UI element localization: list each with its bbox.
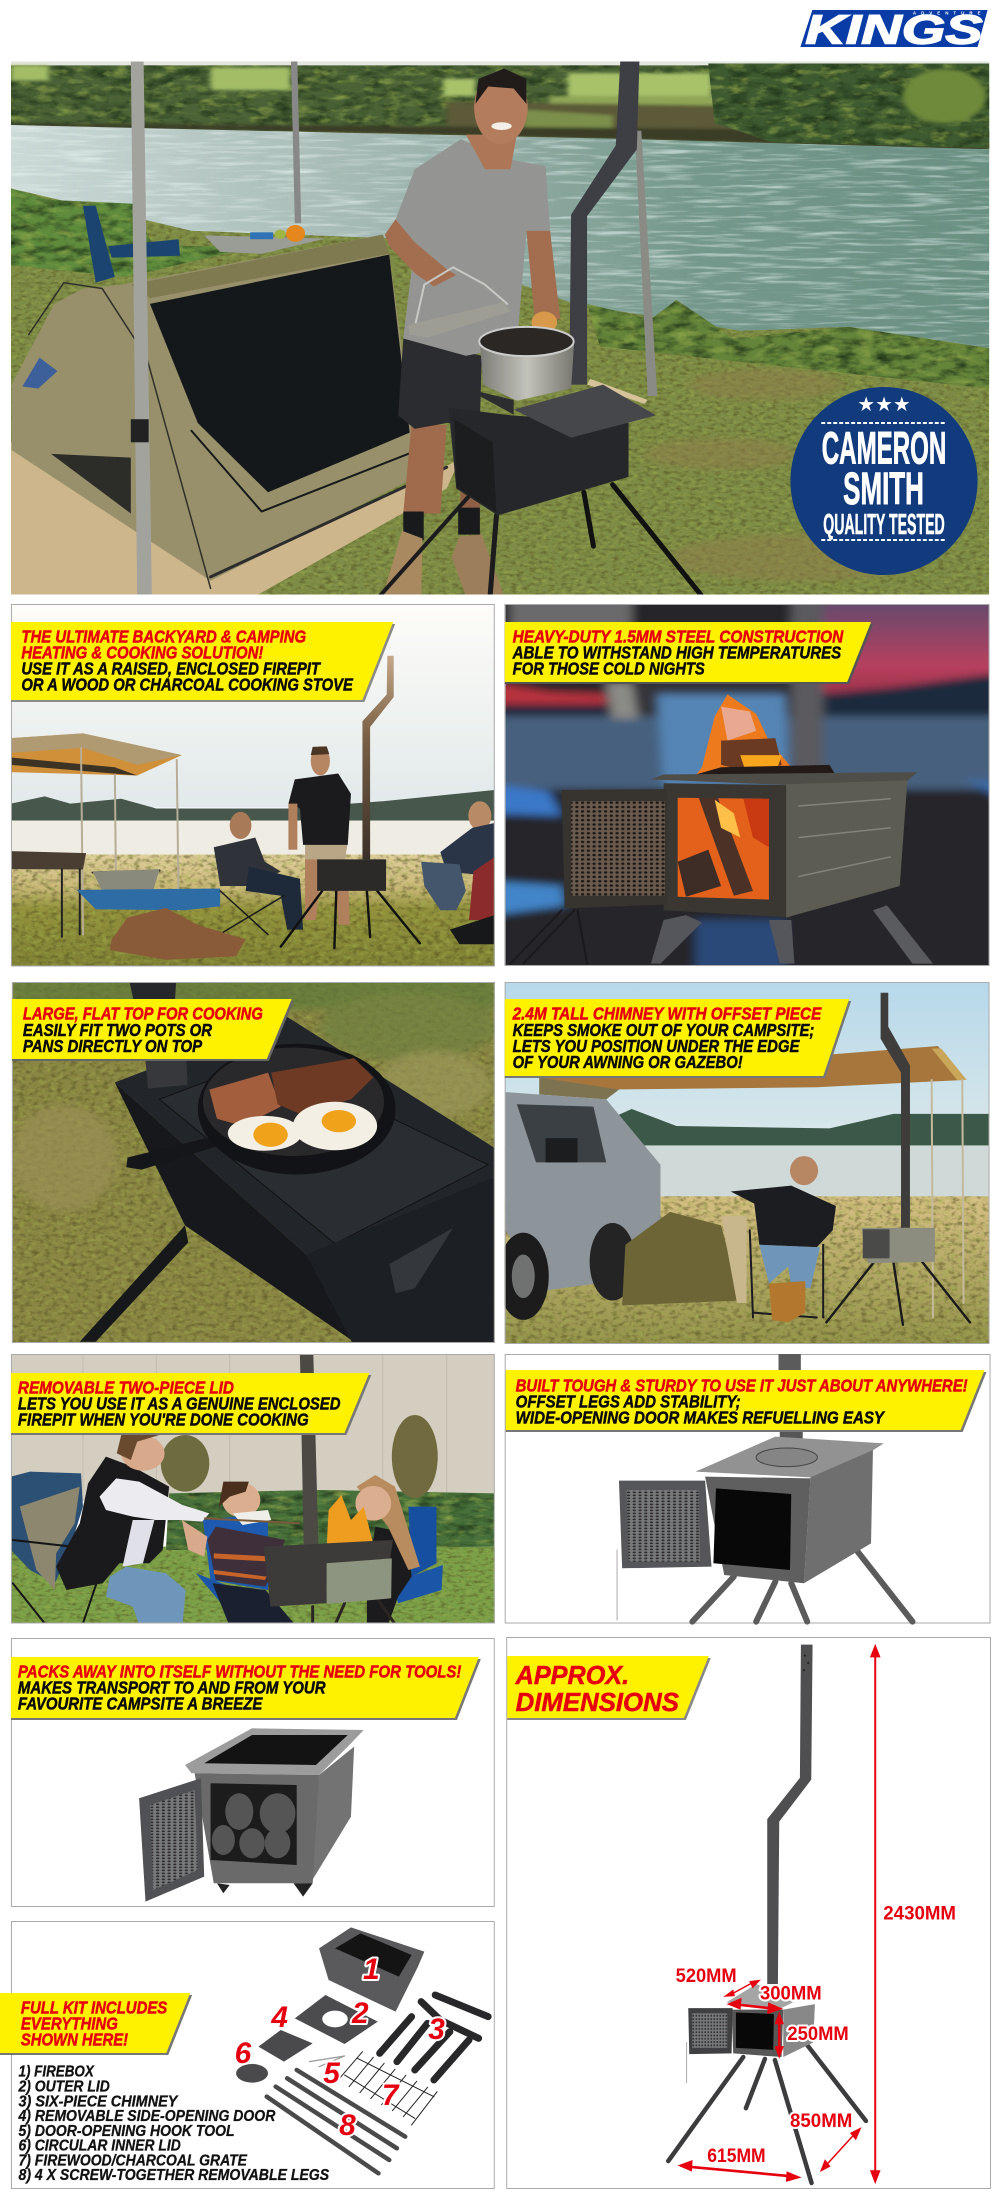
dimension labels: 2430MM <box>883 1903 956 1924</box>
photo: camper under awning <box>498 976 992 1351</box>
banner: OR A WOOD OR CHARCOAL COOKING STOVE <box>21 675 354 695</box>
dimension labels: 520MM <box>676 1966 737 1987</box>
chimney <box>569 62 639 385</box>
panel: hero photo <box>11 62 989 600</box>
woman <box>106 1567 186 1625</box>
flame <box>327 1495 374 1547</box>
product: stove packed with tubes <box>139 1728 364 1902</box>
banner <box>506 1370 987 1432</box>
product: kit parts <box>236 1927 488 2173</box>
parts list: 1) FIREBOX <box>19 2064 95 2081</box>
banner <box>11 1657 481 1720</box>
dimension labels: 615MM <box>707 2146 766 2167</box>
logo: Kings: KINGS <box>805 6 983 53</box>
banner: USE IT AS A RAISED, ENCLOSED FIREPIT <box>21 659 321 679</box>
panel: removable lid <box>11 1354 496 1627</box>
pot <box>480 340 574 401</box>
dimension labels: 300MM <box>760 1984 822 2005</box>
part numbers: 5 <box>323 2057 340 2090</box>
girl <box>367 1527 412 1625</box>
parts list: 2) OUTER LID <box>18 2079 110 2096</box>
banner <box>505 999 851 1078</box>
banner: LARGE, FLAT TOP FOR COOKING <box>23 1003 263 1024</box>
parts list: 4) REMOVABLE SIDE-OPENING DOOR <box>18 2108 276 2125</box>
banner: HEATING & COOKING SOLUTION! <box>21 643 263 663</box>
photo: campers around stove <box>11 604 496 968</box>
banner <box>0 1993 192 2055</box>
badge: Cameron Smith quality tested: ★★★ <box>857 392 911 416</box>
panel: backyard and camping <box>11 604 496 968</box>
banner: WIDE-OPENING DOOR MAKES REFUELLING EASY <box>516 1407 885 1427</box>
banner: SHOWN HERE! <box>21 2029 128 2049</box>
banner: DIMENSIONS <box>516 1689 680 1717</box>
photo: family with marshmallows <box>11 1354 496 1627</box>
man <box>750 1230 823 1318</box>
part numbers: 2 <box>351 1997 369 2030</box>
panel: heavy-duty steel <box>491 595 1000 978</box>
photo: frying pan on stove <box>10 976 498 1354</box>
banner: MAKES TRANSPORT TO AND FROM YOUR <box>18 1677 326 1697</box>
camp chair <box>83 206 180 283</box>
tent <box>622 1212 740 1305</box>
car <box>539 1078 619 1099</box>
panel: tall chimney <box>498 976 992 1351</box>
left chair <box>11 1472 83 1583</box>
banner <box>505 622 873 684</box>
man <box>403 423 447 513</box>
banner: HEAVY-DUTY 1.5MM STEEL CONSTRUCTION <box>513 626 844 647</box>
banner: OF YOUR AWNING OR GAZEBO! <box>513 1052 743 1072</box>
parts list: 5) DOOR-OPENING HOOK TOOL <box>19 2123 235 2140</box>
banner: FULL KIT INCLUDES <box>21 1997 168 2017</box>
dimension arrows <box>678 1644 881 2184</box>
right group <box>468 801 491 830</box>
seated man <box>230 812 251 839</box>
panel: approx dimensions <box>507 1638 991 2188</box>
banner: OFFSET LEGS ADD STABILITY; <box>516 1391 741 1411</box>
badge: Cameron Smith quality tested: SMITH <box>843 463 924 514</box>
banner: EVERYTHING <box>21 2013 118 2033</box>
banner: LETS YOU POSITION UNDER THE EDGE <box>513 1036 801 1056</box>
stove <box>651 915 702 964</box>
banner: FIREPIT WHEN YOU'RE DONE COOKING <box>18 1409 309 1429</box>
product: stove with open door <box>617 1354 913 1622</box>
badge: Cameron Smith quality tested <box>790 387 978 575</box>
dimension labels: 250MM <box>787 2024 849 2045</box>
part numbers: 1 <box>363 1953 380 1986</box>
boy <box>212 1583 295 1625</box>
parts list: 3) SIX-PIECE CHIMNEY <box>19 2093 179 2110</box>
banner: KEEPS SMOKE OUT OF YOUR CAMPSITE; <box>513 1020 814 1040</box>
banner <box>11 1373 371 1435</box>
standing man <box>305 844 348 860</box>
stove <box>826 1262 970 1325</box>
part numbers: 6 <box>235 2037 252 2070</box>
banner: EASILY FIT TWO POTS OR <box>23 1020 212 1040</box>
chimney <box>300 1354 318 1547</box>
dimension labels <box>676 1903 956 2167</box>
part numbers: 7 <box>382 2079 400 2112</box>
banner: THE ULTIMATE BACKYARD & CAMPING <box>21 626 306 647</box>
banner: FAVOURITE CAMPSITE A BREEZE <box>18 1693 263 1713</box>
banner: ABLE TO WITHSTAND HIGH TEMPERATURES <box>512 643 841 663</box>
chimney <box>362 656 394 859</box>
banner: 2.4M TALL CHIMNEY WITH OFFSET PIECE <box>512 1003 822 1024</box>
part numbers: 8 <box>339 2109 356 2142</box>
banner: REMOVABLE TWO-PIECE LID <box>18 1377 234 1397</box>
panel: built tough <box>505 1354 990 1623</box>
logo: Kings <box>800 6 988 53</box>
panel: flat top for cooking <box>10 976 498 1354</box>
parts list <box>18 2064 329 2184</box>
stove <box>613 485 702 596</box>
flame <box>696 695 791 775</box>
part numbers <box>235 1953 445 2142</box>
banner <box>12 999 294 1061</box>
parts list: 7) FIREWOOD/CHARCOAL GRATE <box>19 2152 248 2169</box>
banner: PANS DIRECTLY ON TOP <box>23 1036 202 1056</box>
banner: APPROX. <box>515 1662 629 1690</box>
banner <box>11 622 395 702</box>
banner: FOR THOSE COLD NIGHTS <box>513 659 705 679</box>
parts list: 8) 4 X SCREW-TOGETHER REMOVABLE LEGS <box>19 2167 329 2184</box>
chimney <box>881 993 910 1228</box>
banner <box>507 1656 711 1720</box>
product: stove with chimney and legs <box>668 1645 866 2183</box>
right chair <box>408 1507 436 1577</box>
part numbers: 3 <box>428 2013 445 2046</box>
stove <box>313 1593 396 1625</box>
part numbers: 4 <box>270 2001 288 2034</box>
panel: full kit <box>0 1922 494 2188</box>
banner: PACKS AWAY INTO ITSELF WITHOUT THE NEED FOR TOOLS! <box>18 1661 462 1681</box>
banner: LETS YOU USE IT AS A GENUINE ENCLOSED <box>18 1393 341 1413</box>
dimension labels: 850MM <box>790 2111 852 2132</box>
parts list: 6) CIRCULAR INNER LID <box>19 2138 181 2155</box>
logo: Kings: ADVENTURE <box>913 10 981 16</box>
stove <box>281 890 420 948</box>
panel: packs away <box>11 1638 494 1906</box>
photo: fire in stove <box>491 595 1000 978</box>
